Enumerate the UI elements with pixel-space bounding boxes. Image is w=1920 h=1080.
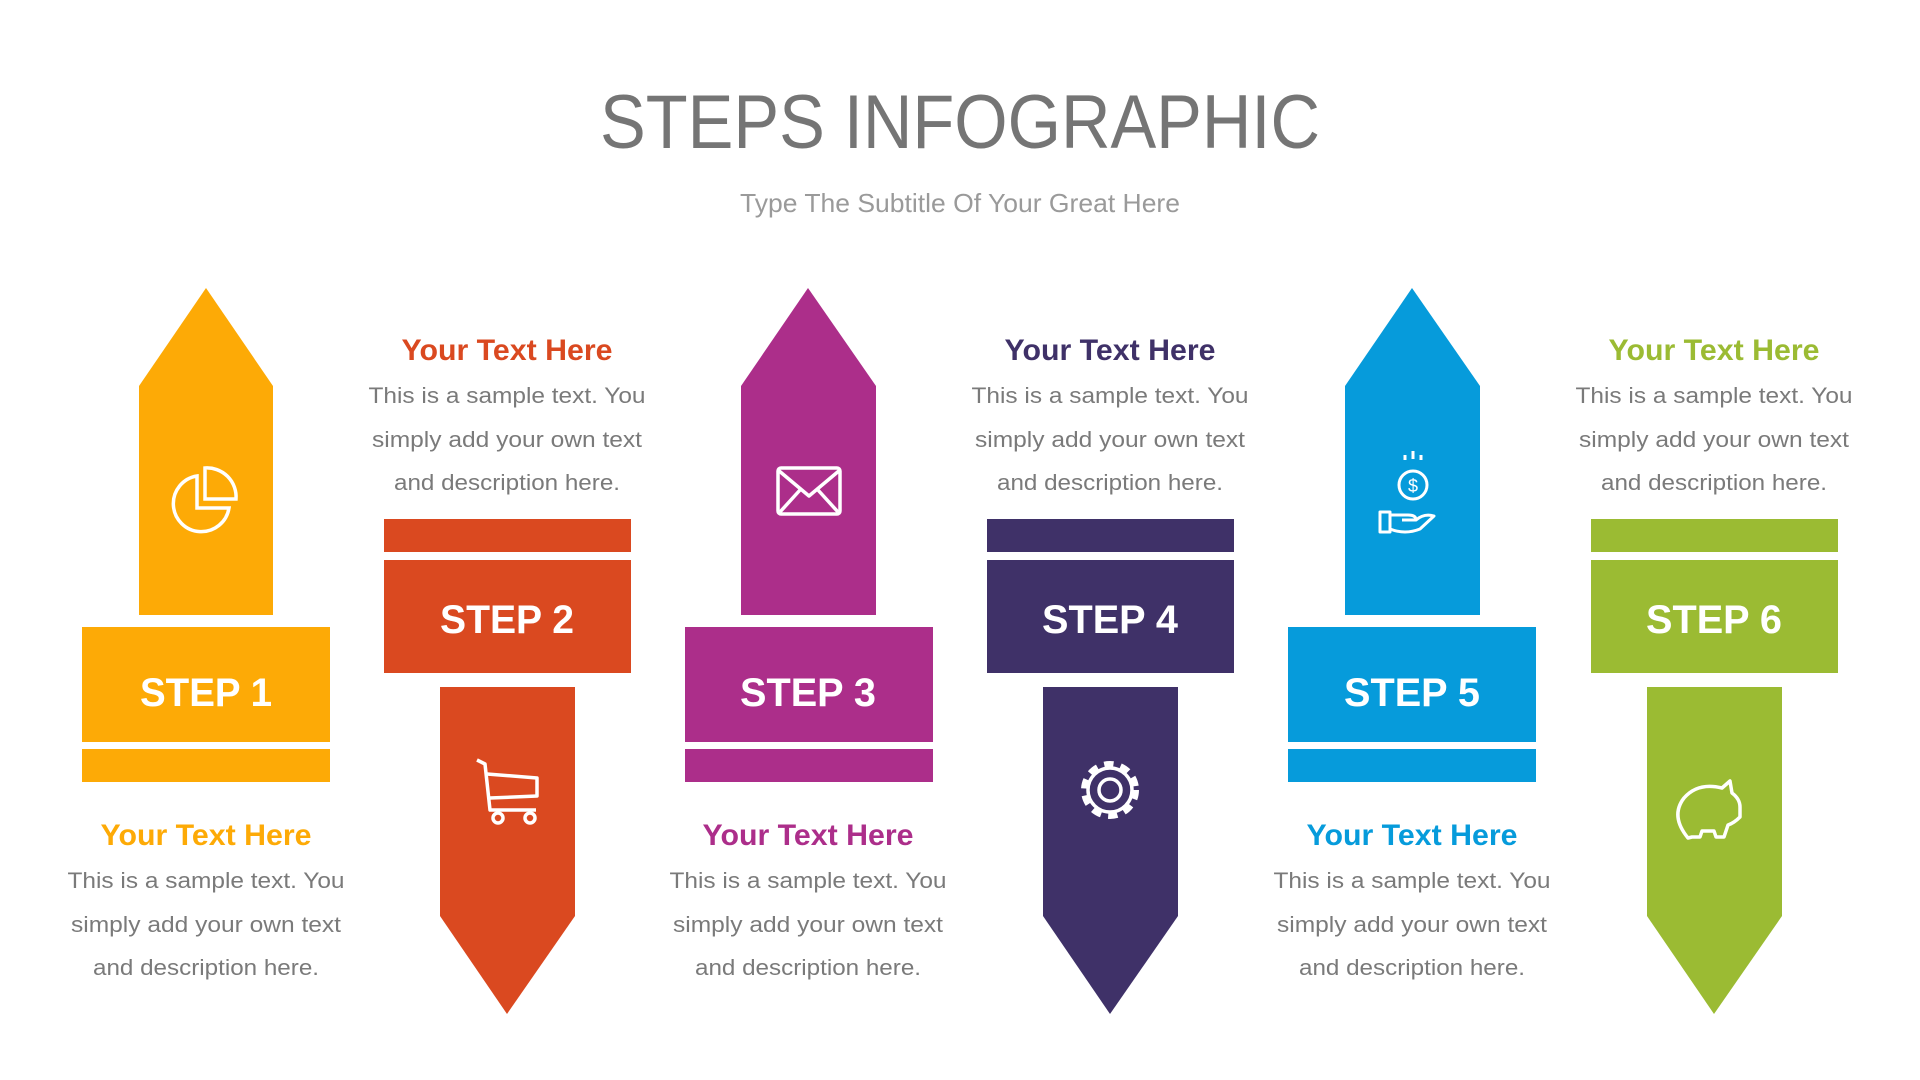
text block: step 6: and description here. [1601, 470, 1827, 495]
text block: step 6: This is a sample text. You [1576, 383, 1852, 408]
text block: step 4: Your Text Here [1004, 334, 1216, 367]
label: step 1: STEP 1 [140, 671, 272, 715]
icon: piggy bank [1678, 781, 1740, 838]
text block: step 5: simply add your own text [1277, 912, 1547, 937]
arrow up: step 1 [139, 288, 273, 615]
step 5 [1274, 288, 1550, 980]
step 2 [368, 334, 646, 1014]
label: step 2: STEP 2 [440, 598, 574, 642]
icon: hand with coin [1380, 451, 1434, 532]
text block: step 1: and description here. [93, 955, 319, 980]
text block: step 2 [368, 334, 646, 495]
arrow up: step 3 [741, 288, 876, 615]
arrow down: step 6 [1647, 687, 1782, 1014]
step 1 [68, 288, 344, 980]
text block: step 1: Your Text Here [100, 819, 312, 852]
box: step 3 [685, 627, 933, 742]
text block: step 4: simply add your own text [975, 427, 1245, 452]
text block: step 3: simply add your own text [673, 912, 943, 937]
text block: step 6 [1576, 334, 1852, 495]
box: step 6 [1591, 519, 1838, 552]
step 3 [670, 288, 946, 980]
text block: step 2: simply add your own text [372, 427, 642, 452]
label: step 3: STEP 3 [740, 671, 876, 715]
icon: envelope [778, 468, 840, 514]
box: step 1 [82, 627, 330, 742]
icon: pie chart [173, 468, 236, 532]
label: step 6: STEP 6 [1646, 598, 1782, 642]
icon: gear [1085, 765, 1135, 815]
text block: step 3: Your Text Here [702, 819, 914, 852]
text block: step 1 [68, 819, 344, 980]
text block: step 2: and description here. [394, 470, 620, 495]
text block: step 5: and description here. [1299, 955, 1525, 980]
text block: step 3: This is a sample text. You [670, 868, 946, 893]
label: step 4: STEP 4 [1042, 598, 1179, 642]
text block: step 2: Your Text Here [402, 334, 612, 367]
subtitle: Type The Subtitle Of Your Great Here [740, 188, 1180, 218]
box: step 5 [1288, 627, 1536, 742]
label: step 5: STEP 5 [1344, 671, 1480, 715]
text block: step 5 [1274, 819, 1550, 980]
text block: step 5: Your Text Here [1306, 819, 1518, 852]
step 4 [972, 334, 1248, 1014]
title: STEPS INFOGRAPHIC [600, 80, 1320, 165]
text block: step 4: and description here. [997, 470, 1223, 495]
arrow up: step 5 [1345, 288, 1480, 615]
step 6 [1576, 334, 1852, 1014]
text block: step 4: This is a sample text. You [972, 383, 1248, 408]
text block: step 6: simply add your own text [1579, 427, 1849, 452]
text block: step 5: This is a sample text. You [1274, 868, 1550, 893]
text block: step 2: This is a sample text. You [368, 383, 646, 408]
icon: hand with coin: $ [1408, 476, 1418, 496]
text block: step 3 [670, 819, 946, 980]
text block: step 1: simply add your own text [71, 912, 341, 937]
text block: step 1: This is a sample text. You [68, 868, 344, 893]
arrow down: step 2 [440, 687, 575, 1014]
arrow down: step 4 [1043, 687, 1178, 1014]
icon: cart [477, 760, 537, 823]
text block: step 6: Your Text Here [1608, 334, 1820, 367]
box: step 4 [987, 519, 1234, 552]
box: step 2 [384, 519, 631, 552]
text block: step 4 [972, 334, 1248, 495]
text block: step 3: and description here. [695, 955, 921, 980]
